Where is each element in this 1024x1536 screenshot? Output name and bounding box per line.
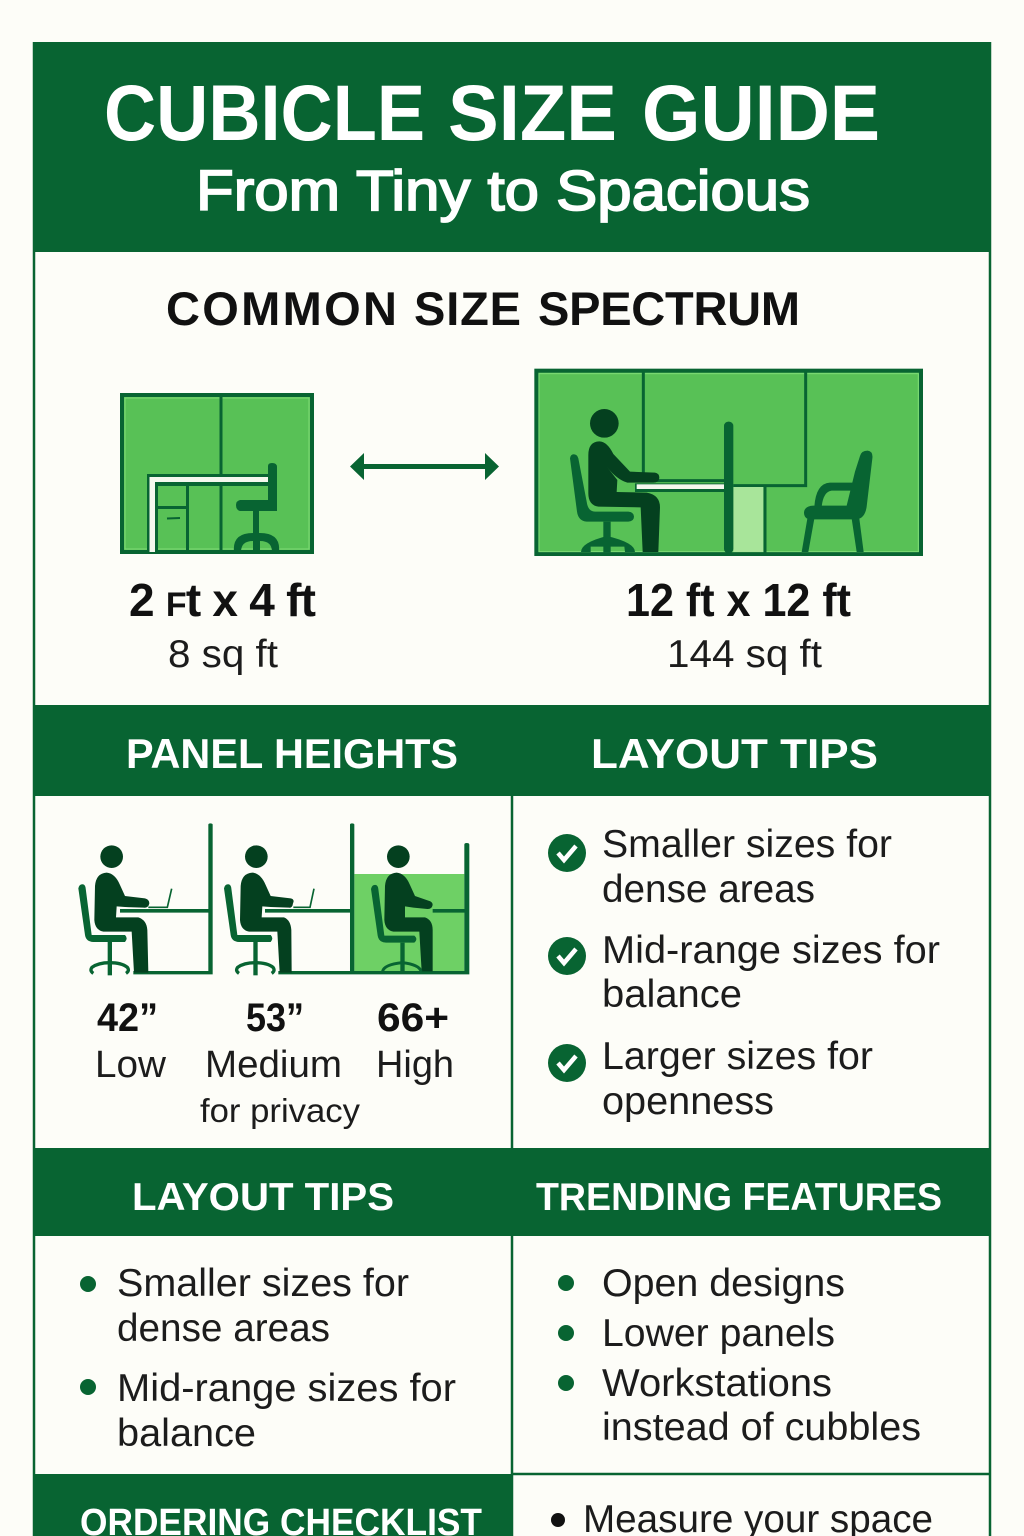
chair (570, 454, 635, 552)
label: high panel: High (376, 1044, 454, 1086)
label: medium panel (200, 996, 361, 1129)
label: large size: 144 sq ft (667, 633, 822, 676)
label: large size (626, 574, 851, 676)
bullet: smaller sizes (80, 1262, 409, 1350)
title: GUIDE (642, 68, 880, 157)
bullet: smaller sizes: Smaller sizes for (117, 1262, 409, 1305)
bullet: workstations: instead of cubbles (602, 1406, 921, 1449)
guest chair (802, 451, 872, 552)
check item: mid-range sizes (548, 929, 940, 1016)
section band: layout tips and trending features: TRENDING FEATURES (536, 1176, 942, 1219)
check item: smaller sizes: dense areas (602, 868, 815, 911)
bullet: open designs: Open designs (602, 1262, 845, 1305)
bullet: smaller sizes: dense areas (117, 1307, 330, 1350)
check item: mid-range sizes: balance (602, 973, 742, 1016)
panel: layout tips checklist (548, 823, 940, 1123)
label: medium panel: for privacy (200, 1092, 361, 1129)
icon: small cubicle (122, 395, 312, 552)
bullet: mid-range sizes: balance (117, 1412, 256, 1455)
column divider (512, 796, 990, 1536)
section band: panel heights and layout tips: PANEL HEIGHTS (126, 730, 458, 777)
arrow: size range (350, 453, 499, 480)
bullet: lower panels: Lower panels (602, 1312, 835, 1355)
label: low panel: 42” (97, 996, 158, 1040)
label: small size: 8 sq ft (168, 633, 278, 676)
person (588, 409, 660, 552)
section band: panel heights and layout tips: LAYOUT TIPS (591, 730, 878, 777)
subtitle: From Tiny to Spacious (196, 159, 810, 223)
check item: mid-range sizes: Mid-range sizes for (602, 929, 940, 972)
bullet: workstations: Workstations (602, 1362, 832, 1405)
bullet: mid-range sizes (80, 1367, 456, 1455)
check item: smaller sizes (548, 823, 892, 911)
panel: common size spectrum (122, 282, 921, 676)
label: medium panel: Medium (205, 1044, 342, 1086)
section band: ordering checklist (33, 1474, 512, 1536)
seated figure 1 (78, 845, 149, 975)
heading: common size spectrum: SPECTRUM (538, 282, 800, 335)
bullet: workstations (558, 1362, 921, 1449)
panel: panel heights (78, 823, 469, 1129)
heading: common size spectrum: COMMON (166, 282, 397, 335)
section band: layout tips and trending features: LAYOUT TIPS (132, 1176, 394, 1219)
check item: smaller sizes: Smaller sizes for (602, 823, 892, 866)
title (104, 68, 880, 157)
check item: larger sizes: openness (602, 1080, 774, 1123)
seated figure 2 (224, 845, 294, 975)
heading: common size spectrum: SIZE (414, 282, 521, 335)
icon: large cubicle (536, 371, 921, 554)
icon: panel height figures (78, 823, 469, 975)
seated figure 3 (384, 845, 433, 971)
title: CUBICLE (104, 68, 425, 157)
panel: layout tips bullets (80, 1262, 456, 1455)
label: medium panel: 53” (246, 996, 304, 1040)
title: SIZE (448, 68, 617, 157)
label: high panel (376, 996, 454, 1086)
label: large size: 12 ft x 12 ft (626, 574, 851, 626)
label: low panel (95, 996, 167, 1086)
section band: layout tips and trending features (33, 1148, 991, 1236)
check item: larger sizes: Larger sizes for (602, 1035, 873, 1078)
label: small size: 2 Ft x 4 ft (129, 574, 316, 626)
label: low panel: Low (95, 1044, 167, 1086)
heading: common size spectrum (166, 282, 800, 335)
title banner (33, 42, 991, 252)
panel: trending features (558, 1262, 921, 1449)
section band: panel heights and layout tips (33, 705, 991, 796)
label: high panel: 66+ (377, 996, 449, 1040)
check item: larger sizes (548, 1035, 873, 1123)
label: small size (129, 574, 316, 676)
bullet: mid-range sizes: Mid-range sizes for (117, 1367, 456, 1410)
